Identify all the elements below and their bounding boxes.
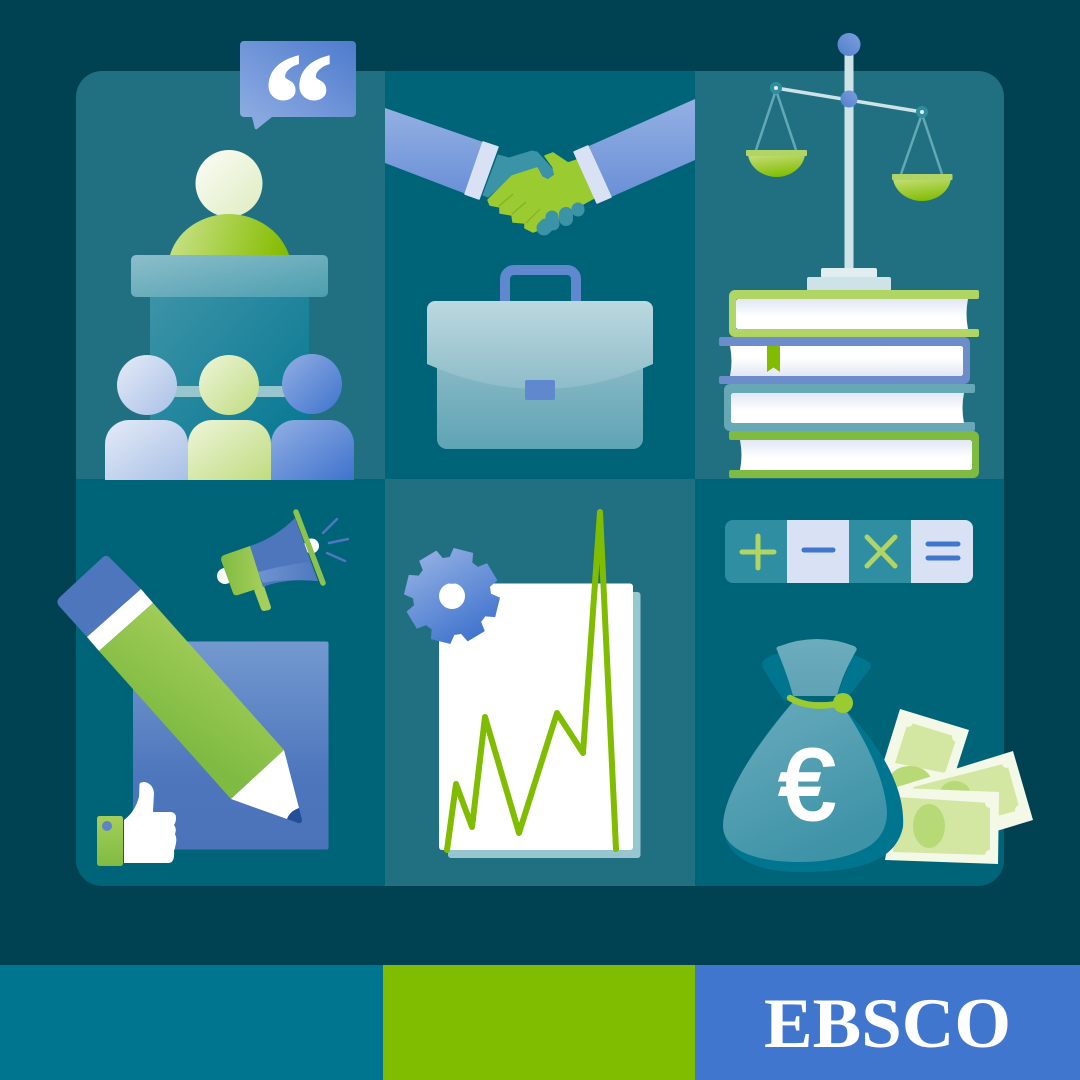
icon: calculator operators — [725, 520, 973, 583]
icon: thumbs up — [97, 782, 176, 866]
panel: top left — [76, 71, 385, 479]
icon: gear — [404, 548, 500, 644]
icon: briefcase — [427, 270, 653, 449]
panel grid — [76, 71, 1004, 886]
panel: bottom left — [76, 479, 385, 886]
panel: bottom middle — [385, 479, 695, 886]
icon: notebook — [133, 642, 328, 850]
book 1 — [729, 290, 979, 337]
speaker — [170, 150, 289, 255]
icon: stack of books — [719, 290, 979, 478]
banknote front — [885, 788, 999, 864]
icon: speech bubble with quote mark — [240, 26, 356, 181]
book 4 — [729, 431, 979, 478]
icon: speaker at podium with audience — [105, 150, 354, 480]
footer colour band — [0, 965, 1080, 1080]
panel: top right — [695, 71, 1004, 479]
icon: speech bubble with quote mark: “ — [263, 26, 333, 181]
icon: money bag with euro sign — [723, 639, 903, 872]
panel: top middle — [385, 71, 695, 479]
podium — [131, 255, 328, 480]
icon: megaphone — [217, 512, 348, 611]
audience — [105, 354, 354, 480]
icon: pencil — [57, 556, 302, 823]
icon: handshake — [385, 99, 695, 232]
banknote back — [878, 709, 969, 805]
book 3 — [724, 384, 975, 431]
icon: scales of justice — [746, 33, 952, 291]
icon: banknotes — [878, 709, 1033, 864]
book 2 with bookmark — [719, 337, 970, 384]
icon: money bag with euro sign: € — [779, 729, 835, 841]
line chart — [447, 512, 616, 850]
panel: bottom right — [695, 479, 1004, 886]
icon: report page with line chart — [439, 512, 640, 858]
logo: EBSCO: EBSCO — [764, 985, 1011, 1063]
banknote middle — [897, 751, 1033, 855]
